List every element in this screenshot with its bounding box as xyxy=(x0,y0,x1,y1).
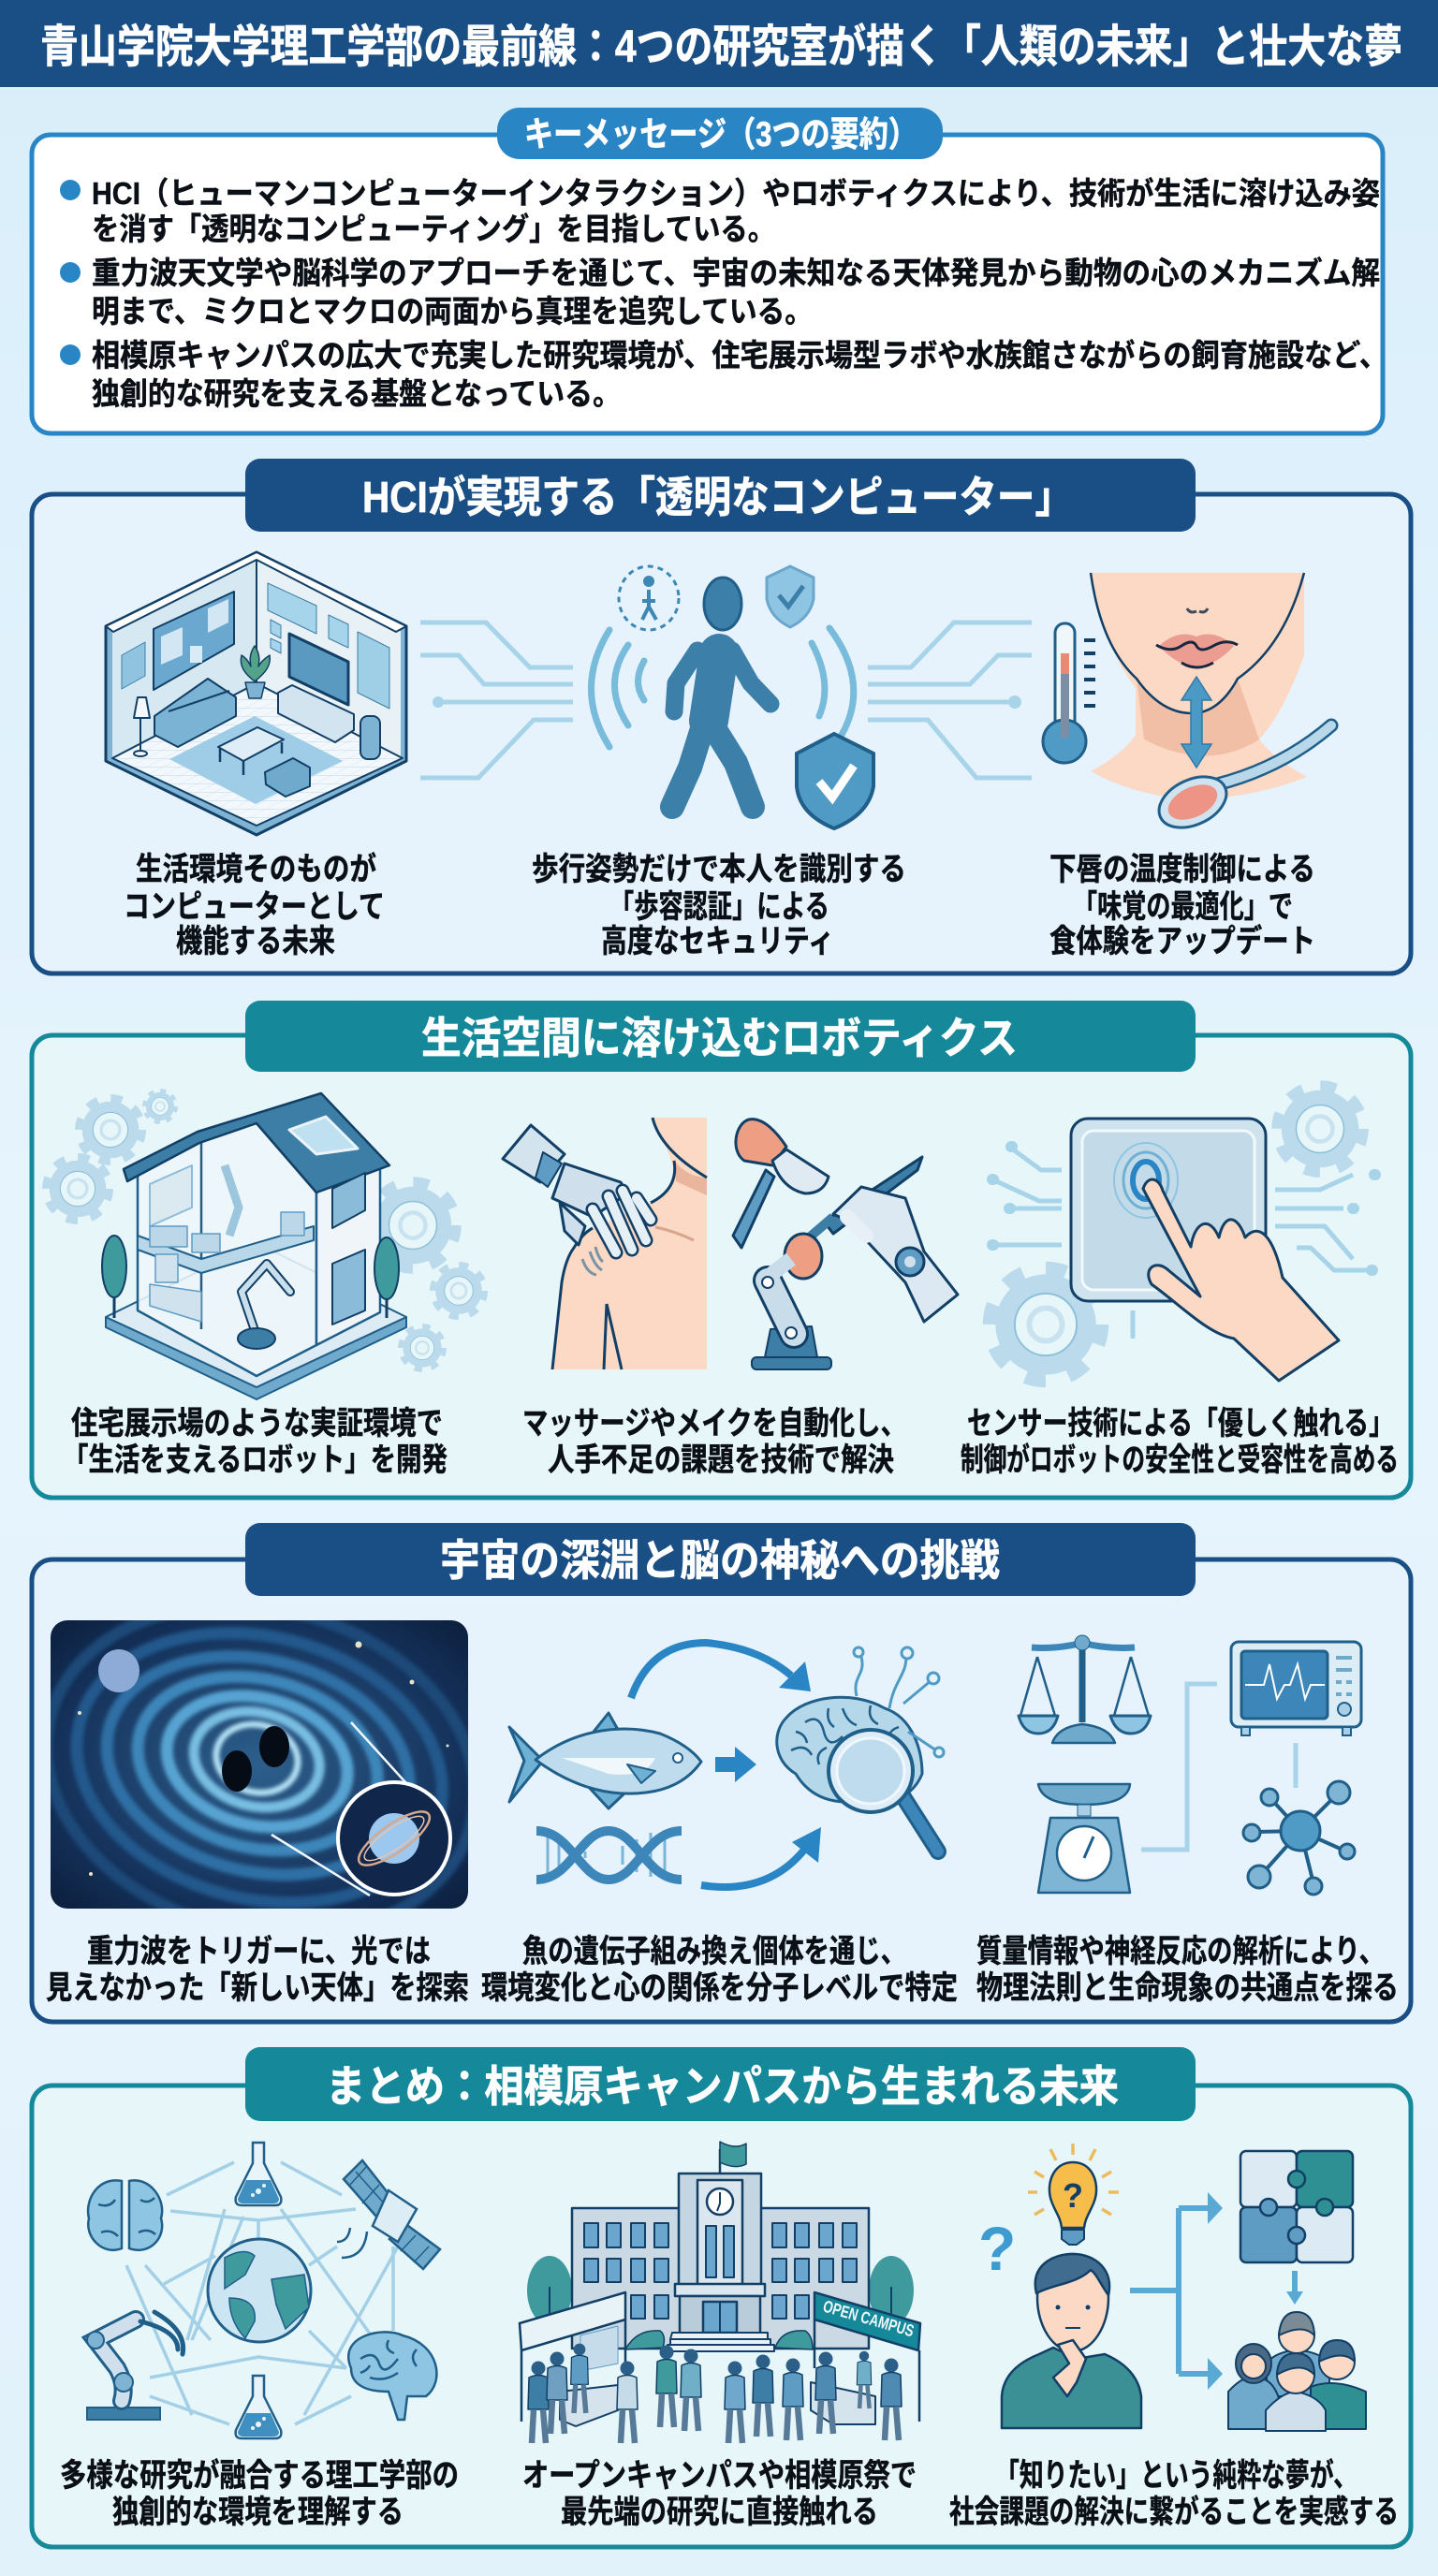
caption: diverse research xyxy=(60,2457,459,2530)
caption: living environment: 機能する未来 xyxy=(176,924,335,959)
icon: brain with magnifier xyxy=(777,1647,944,1852)
exhibition tables xyxy=(560,2382,875,2426)
caption: living environment xyxy=(124,851,385,959)
robotics heading xyxy=(245,1001,1196,1072)
panel: robotics xyxy=(32,1001,1411,1498)
flow arrows xyxy=(1130,2192,1303,2390)
HCI heading: HCIが実現する「透明なコンピューター」 xyxy=(362,473,1073,521)
caption: taste xyxy=(1049,852,1315,959)
thermometer xyxy=(1043,623,1095,763)
caption: open campus: オープンキャンパスや相模原祭で xyxy=(522,2458,917,2494)
caption: fish genes: 環境変化と心の関係を分子レベルで特定 xyxy=(481,1970,958,2006)
arrow: top arc xyxy=(631,1643,811,1698)
question mark: ? xyxy=(978,2214,1016,2283)
icon: massage robot arm on shoulder xyxy=(503,1118,707,1369)
caption: gait: 「歩容認証」による xyxy=(609,889,829,925)
icon: flask bottom xyxy=(236,2376,281,2438)
arrow: bottom arc xyxy=(701,1827,821,1887)
flag xyxy=(720,2142,746,2186)
spoon xyxy=(1151,725,1331,838)
trees xyxy=(102,1236,399,1318)
key point 1 xyxy=(60,176,1380,246)
caption: pure dream xyxy=(949,2457,1399,2530)
icon: fish xyxy=(509,1713,701,1808)
caption: gravitational: 重力波をトリガーに、光では xyxy=(87,1934,431,1969)
icon: lightbulb xyxy=(1028,2144,1119,2245)
icon: satellite xyxy=(337,2160,440,2269)
dashed gait circle xyxy=(619,566,679,630)
large shield xyxy=(797,734,873,828)
icon: balance scale xyxy=(1019,1635,1151,1743)
key point 2 xyxy=(60,256,1380,329)
left banner xyxy=(520,2292,625,2422)
temperature arrow xyxy=(1181,677,1211,768)
icon: campus building and open campus xyxy=(520,2142,920,2443)
icon: thinking person with ideas xyxy=(978,2144,1366,2431)
signal arcs xyxy=(592,628,854,747)
trees xyxy=(527,2256,914,2325)
network diagram xyxy=(87,2143,440,2438)
key message heading pill xyxy=(497,108,943,159)
universe heading: 宇宙の深淵と脳の神秘への挑戦 xyxy=(440,1536,1000,1585)
lips and nose xyxy=(1156,608,1238,667)
windows xyxy=(584,2223,857,2319)
caption: gravitational xyxy=(46,1934,469,2006)
HCI heading xyxy=(245,459,1196,532)
caption: diverse research: 独創的な環境を理解する xyxy=(112,2495,404,2530)
caption: gravitational: 見えなかった「新しい天体」を探索 xyxy=(46,1970,469,2006)
icon: house lab with gears xyxy=(47,1091,484,1399)
caption: mass and neural xyxy=(976,1934,1399,2006)
summary heading: まとめ：相模原キャンパスから生まれる未来 xyxy=(326,2062,1119,2111)
caption: taste: 下唇の温度制御による xyxy=(1049,852,1315,887)
key point 2: 明まで、ミクロとマクロの両面から真理を追究している。 xyxy=(92,294,813,329)
icon: makeup robot and brushes xyxy=(733,1120,958,1369)
visitors xyxy=(528,2344,902,2443)
icon: touch panel and hand xyxy=(990,1087,1375,1381)
caption: open campus: 最先端の研究に直接触れる xyxy=(561,2495,878,2530)
panel: summary xyxy=(32,2047,1411,2547)
caption: gait xyxy=(532,852,906,959)
icon: brain right xyxy=(348,2332,436,2420)
caption: gait: 高度なセキュリティ xyxy=(601,924,834,959)
title bar xyxy=(0,0,1438,87)
icon: kitchen scale xyxy=(1038,1784,1130,1893)
icon: flask top xyxy=(236,2143,281,2205)
caption: taste: 「味覚の最適化」で xyxy=(1073,889,1293,925)
robotics heading: 生活空間に溶け込むロボティクス xyxy=(421,1014,1018,1062)
caption: massage and make-up: 人手不足の課題を技術で解決 xyxy=(548,1442,894,1478)
icon: globe xyxy=(208,2239,311,2342)
icon: group of people xyxy=(1228,2312,1366,2431)
panel: key message xyxy=(32,108,1387,433)
caption: open campus xyxy=(522,2458,917,2530)
icon: lightbulb: ? xyxy=(1063,2176,1083,2215)
icon: brain left xyxy=(88,2180,162,2250)
universe heading xyxy=(245,1523,1196,1596)
summary heading xyxy=(245,2047,1196,2121)
open campus banner xyxy=(814,2292,920,2422)
key point 1: を消す「透明なコンピューティング」を目指している。 xyxy=(92,212,775,246)
icon: smart room xyxy=(106,552,406,835)
inset planet xyxy=(338,1782,450,1895)
key point 3: 独創的な研究を支える基盤となっている。 xyxy=(92,376,621,411)
key message heading pill: キーメッセージ（3つの要約） xyxy=(524,115,917,154)
icon: puzzle xyxy=(1240,2151,1353,2262)
icon: robot arm xyxy=(87,2312,183,2420)
icon: face and taste xyxy=(1043,573,1331,838)
caption: house lab: 「生活を支えるロボット」を開発 xyxy=(63,1442,448,1478)
caption: fish genes xyxy=(481,1934,958,2006)
caption: taste: 食体験をアップデート xyxy=(1049,923,1315,959)
icon: molecule xyxy=(1243,1781,1355,1895)
icon: gait recognition person xyxy=(592,566,873,828)
caption: soft touch xyxy=(961,1406,1399,1478)
caption: house lab xyxy=(63,1406,448,1478)
caption: diverse research: 多様な研究が融合する理工学部の xyxy=(60,2457,459,2494)
circuit lines left xyxy=(420,622,573,778)
caption: living environment: 生活環境そのものが xyxy=(136,851,376,887)
lower robot arm xyxy=(238,1264,290,1349)
caption: massage and make-up: マッサージやメイクを自動化し、 xyxy=(522,1406,906,1442)
caption: fish genes: 魚の遺伝子組み換え個体を通じ、 xyxy=(522,1934,906,1969)
icon: DNA xyxy=(536,1830,682,1880)
open campus banner: OPEN CAMPUS xyxy=(821,2297,917,2340)
caption: gait: 歩行姿勢だけで本人を識別する xyxy=(532,852,906,887)
connector lines xyxy=(1141,1684,1296,1850)
panel: universe and brain xyxy=(11,1523,1411,2022)
caption: massage and make-up xyxy=(522,1406,906,1478)
key point 3 xyxy=(60,338,1387,411)
circuit lines right xyxy=(868,622,1032,778)
image: gravitational waves xyxy=(51,1620,468,1909)
arrow: fish to brain xyxy=(715,1747,756,1782)
caption: house lab: 住宅展示場のような実証環境で xyxy=(71,1406,443,1442)
clock tower xyxy=(668,2174,774,2351)
icon: monitor xyxy=(1231,1642,1361,1735)
caption: living environment: コンピューターとして xyxy=(124,889,385,925)
panel: HCI xyxy=(32,459,1411,973)
small shield xyxy=(767,566,814,627)
